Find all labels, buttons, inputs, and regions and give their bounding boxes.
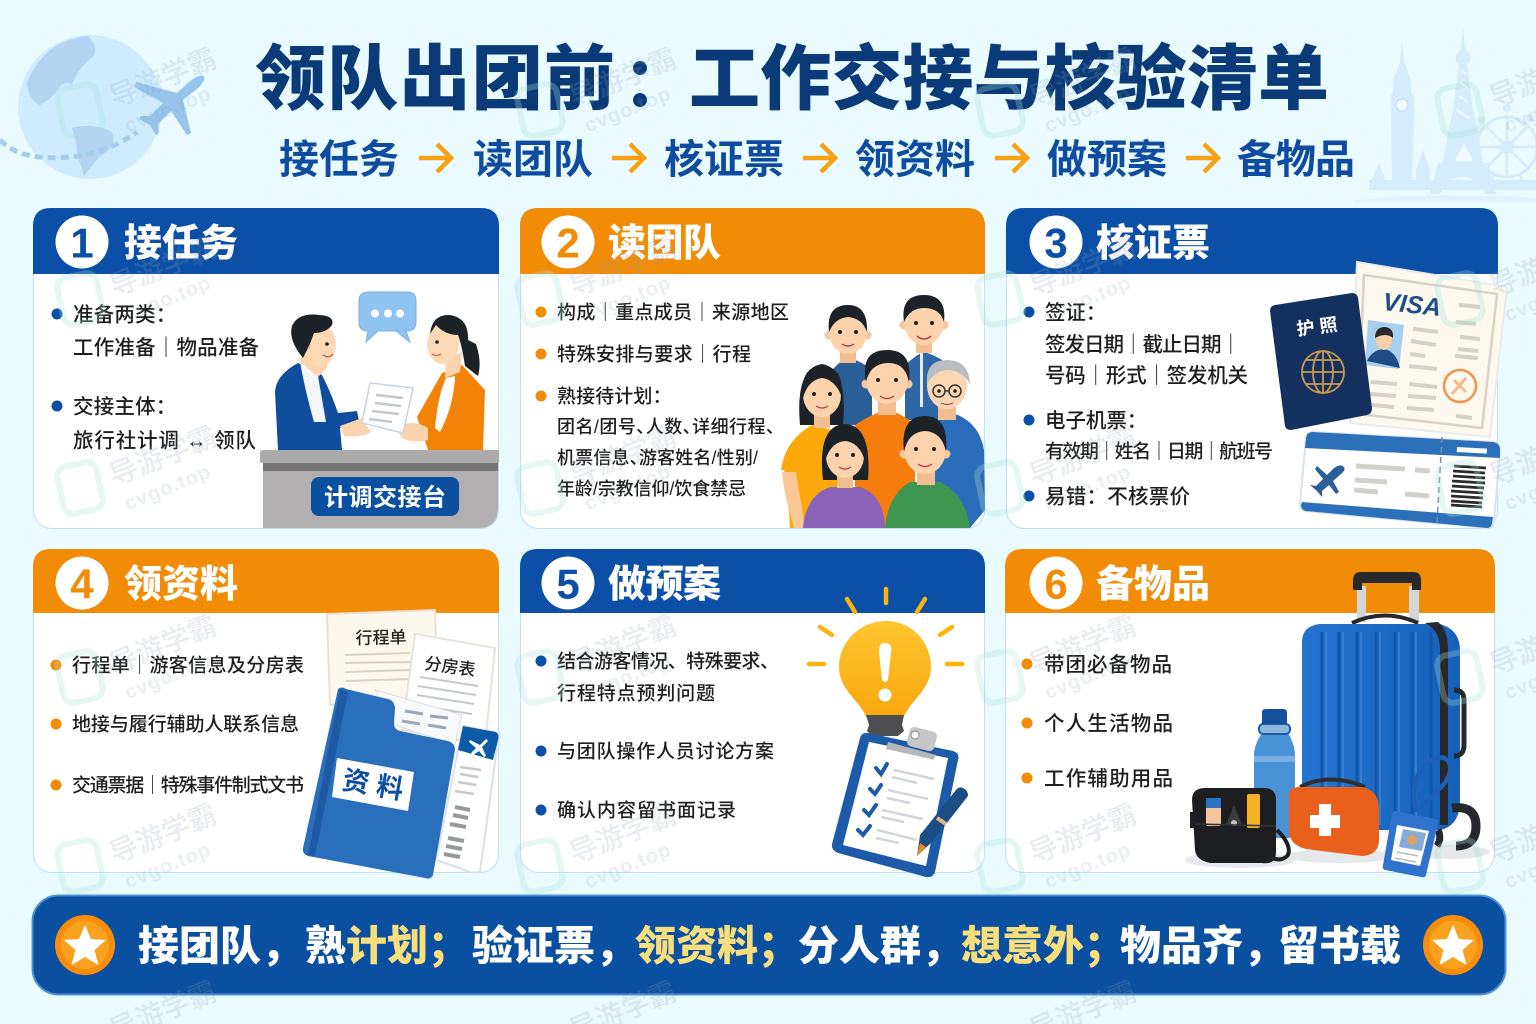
text block 3: 电子机票：	[1045, 410, 1137, 432]
number badge 3	[1030, 216, 1082, 268]
watermarks: 导游学霸	[565, 43, 681, 113]
illustration: visa page: VISA	[1382, 288, 1442, 322]
watermarks: 导游学霸	[105, 799, 221, 869]
summary banner	[32, 896, 1506, 994]
illustration: document folder	[303, 610, 499, 879]
watermarks: 导游学霸	[105, 43, 221, 113]
text block 6: 工作辅助用品	[1044, 768, 1173, 790]
text block 5: 行程特点预判问题	[557, 682, 715, 704]
panel: 3 核证票	[1006, 208, 1507, 528]
watermarks: 导游学霸	[1025, 232, 1141, 302]
visa stamp	[1444, 370, 1476, 402]
watermarks: cvgo.top	[122, 650, 214, 704]
woman in orange suit	[395, 315, 485, 450]
text block 5: 确认内容留书面记录	[557, 800, 736, 822]
watermarks: 导游学霸	[105, 610, 221, 680]
text block 1: 准备两类：	[73, 304, 166, 326]
panel: 2 读团队	[520, 208, 985, 528]
watermarks: cvgo.top	[1042, 461, 1134, 515]
watermarks: cvgo.top	[582, 272, 674, 326]
process flow subtitle: 备物品	[1237, 138, 1355, 182]
watermarks: cvgo.top	[122, 272, 214, 326]
text block 3: 签证：	[1045, 302, 1096, 324]
watermarks: cvgo.top	[1042, 650, 1134, 704]
process flow subtitle: 领资料	[855, 138, 975, 182]
illustration: visa page	[1350, 262, 1507, 437]
heading 6: 备物品	[1096, 564, 1210, 606]
watermarks: cvgo.top	[582, 650, 674, 704]
rooming list sheet	[402, 634, 495, 745]
process flow subtitle: 接任务	[279, 138, 399, 182]
watermarks: cvgo.top	[1042, 272, 1134, 326]
back left man	[824, 305, 872, 425]
handover document	[362, 383, 413, 433]
text block 2: 熟接待计划：	[557, 386, 662, 408]
number badge 6: 6	[1044, 560, 1068, 608]
desk	[260, 450, 499, 528]
number badge 1	[56, 216, 108, 268]
text block 3: 易错：不核票价	[1045, 486, 1190, 508]
mnemonic text: 物品齐，	[1120, 923, 1284, 969]
number badge 5	[542, 556, 594, 610]
process flow subtitle: 核证票	[664, 138, 784, 182]
illustration: tour group	[781, 295, 985, 528]
process flow subtitle	[279, 138, 1355, 182]
process flow subtitle: 读团队	[473, 138, 593, 182]
number badge 3: 3	[1044, 220, 1068, 266]
document peeking from folder	[375, 690, 462, 745]
first aid kit	[1289, 780, 1379, 856]
mnemonic text: 验证票，	[472, 923, 636, 969]
mnemonic text: 接团队，	[138, 923, 302, 969]
text block 6	[1022, 654, 1173, 790]
visa photo	[1365, 320, 1404, 369]
watermarks: cvgo.top	[122, 461, 214, 515]
number badge 2	[542, 216, 594, 268]
text block 3: 签发日期｜截止日期｜	[1045, 332, 1241, 356]
number badge 2: 2	[556, 220, 580, 266]
watermarks: 导游学霸	[1025, 421, 1141, 491]
text block 2	[536, 302, 789, 499]
text block 4: 交通票据｜特殊事件制式文书	[72, 774, 304, 796]
icon: globe with airplane	[0, 35, 204, 179]
text block 2: 特殊安排与要求｜行程	[557, 344, 751, 366]
folder	[303, 688, 455, 879]
title: 领队出团前	[255, 40, 615, 120]
black toiletry bag	[1192, 788, 1289, 863]
suitcase	[1302, 572, 1476, 846]
text block 1: 交接主体：	[73, 396, 166, 418]
watermarks: 导游学霸	[1025, 799, 1141, 869]
panel: 1 接任务	[33, 208, 499, 528]
watermarks: 导游学霸	[565, 232, 681, 302]
watermarks: cvgo.top	[122, 839, 214, 893]
watermarks: 导游学霸	[105, 232, 221, 302]
mnemonic text: 想意外；	[961, 923, 1125, 969]
text block 2: 团名/团号、人数、详细行程、	[557, 417, 775, 437]
text block 5: 结合游客情况、特殊要求、	[557, 650, 779, 672]
number badge 4	[56, 556, 108, 610]
panel: 4 领资料	[33, 549, 499, 879]
center man in orange	[855, 350, 915, 528]
heading 5: 做预案	[608, 564, 721, 606]
itinerary sheet: 行程单	[355, 628, 407, 648]
pen	[917, 787, 968, 856]
watermarks: cvgo.top	[582, 83, 674, 137]
number badge 4: 4	[70, 560, 94, 608]
watermarks: cvgo.top	[1042, 83, 1134, 137]
boy in green	[885, 416, 970, 528]
mnemonic text: 留书载	[1278, 923, 1401, 969]
desk: 计调交接台	[324, 484, 446, 512]
boarding pass	[436, 726, 499, 872]
panel: 5 做预案	[520, 549, 985, 877]
text block 4	[50, 654, 304, 796]
elderly man with glasses	[927, 360, 985, 528]
folder label	[332, 758, 414, 811]
text block 5: 与团队操作人员讨论方案	[557, 740, 774, 762]
mnemonic text: 领资料；	[635, 923, 799, 969]
illustration: passport: 护 照	[1295, 315, 1339, 339]
illustration: handover at desk	[260, 292, 499, 528]
watermarks: 导游学霸	[1025, 43, 1141, 113]
text block 2: 年龄/宗教信仰/饮食禁忌	[557, 478, 746, 499]
watermarks: cvgo.top	[1042, 839, 1134, 893]
speech bubble	[359, 292, 416, 342]
illustration: passport	[1270, 293, 1372, 430]
text block 3	[1024, 302, 1273, 508]
illustration: travel items	[1185, 572, 1490, 877]
watermarks: 导游学霸	[565, 421, 681, 491]
icon: light bulb with exclamation	[809, 589, 962, 736]
clipboard clip	[886, 726, 938, 760]
text block 2: 机票信息、游客姓名/性别/	[557, 448, 758, 468]
itinerary sheet	[327, 610, 438, 705]
heading 3: 核证票	[1096, 223, 1210, 265]
watermarks: 导游学霸	[565, 610, 681, 680]
watermarks: 导游学霸	[565, 799, 681, 869]
text block 4: 行程单｜游客信息及分房表	[72, 654, 304, 676]
mnemonic text: 计划；	[346, 923, 469, 969]
text block 3: 有效期｜姓名｜日期｜航班号	[1045, 440, 1273, 462]
mnemonic text: 分人群，	[798, 923, 962, 969]
title	[255, 40, 1329, 120]
watermarks: cvgo.top	[582, 461, 674, 515]
number badge 6	[1030, 556, 1082, 610]
watermarks: cvgo.top	[582, 839, 674, 893]
mnemonic text: 熟	[305, 923, 346, 969]
watermarks: 导游学霸	[1025, 610, 1141, 680]
man in blue suit	[275, 314, 371, 450]
woman in yellow	[781, 364, 844, 528]
heading 4: 领资料	[124, 564, 238, 606]
watermarks: 导游学霸	[105, 421, 221, 491]
illustration: air ticket	[1300, 432, 1500, 528]
process flow subtitle: 做预案	[1047, 138, 1167, 182]
check marks	[858, 764, 887, 835]
text block 1: 旅行社计调 ↔ 领队	[73, 430, 256, 452]
text block 3: 号码｜形式｜签发机关	[1045, 364, 1248, 388]
number badge 5: 5	[556, 560, 580, 608]
heading 2: 读团队	[608, 223, 721, 265]
girl in purple	[803, 424, 885, 528]
barcode	[1451, 466, 1486, 507]
title: 工作交接与核验清单	[689, 40, 1329, 120]
text block 6: 带团必备物品	[1044, 654, 1172, 676]
folder label: 资 料	[340, 765, 406, 805]
icon: star right	[1423, 915, 1483, 975]
text block 1: 工作准备｜物品准备	[73, 336, 260, 360]
heading 1: 接任务	[124, 223, 238, 265]
ID badge	[1383, 811, 1438, 877]
number badge 1: 1	[70, 220, 94, 266]
water bottle	[1254, 709, 1295, 838]
text block 1	[52, 304, 260, 452]
text block 5	[536, 650, 779, 822]
back right man	[900, 295, 948, 420]
text block 2: 构成｜重点成员｜来源地区	[557, 302, 789, 324]
panel: 6 备物品	[1005, 549, 1495, 877]
text block 4: 地接与履行辅助人联系信息	[72, 714, 299, 736]
watermarks: cvgo.top	[122, 83, 214, 137]
icon: checklist clipboard and pen	[832, 726, 968, 877]
rooming list sheet: 分房表	[423, 654, 477, 680]
text block 6: 个人生活物品	[1044, 712, 1173, 736]
icon: star left	[55, 915, 115, 975]
passport globe	[1302, 351, 1344, 393]
icon: landmark skyline	[1355, 27, 1536, 202]
